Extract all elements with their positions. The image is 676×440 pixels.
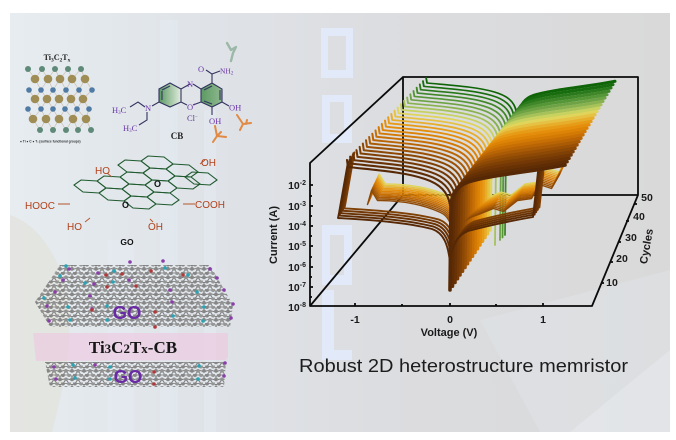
icon: orange figures — [213, 115, 251, 142]
cycles labels: 20 — [616, 253, 628, 265]
CB molecule: Cl — [187, 113, 195, 123]
y axis labels: 10 — [288, 221, 300, 233]
CB molecule: C — [132, 123, 138, 133]
GO molecule: O — [154, 179, 161, 189]
y axis labels — [288, 180, 306, 314]
CB molecule — [112, 43, 241, 141]
GO molecule: COOH — [195, 200, 225, 211]
y axis labels: -3 — [300, 201, 306, 208]
y axis labels: -5 — [300, 241, 306, 248]
pink Ti3C2Tx-CB layer — [33, 333, 228, 361]
cycles labels: 30 — [625, 232, 637, 244]
y axis labels: -4 — [300, 221, 306, 228]
y axis labels: -8 — [300, 302, 306, 309]
lower GO text: GO — [114, 366, 142, 387]
CB molecule: H — [123, 123, 129, 133]
GO molecule: HO — [95, 166, 110, 177]
chart frame front — [310, 77, 638, 306]
cycling curves — [338, 78, 615, 290]
CB molecule: 3 — [129, 129, 132, 134]
GO molecule: HO — [67, 222, 82, 233]
CB molecule: 3 — [118, 111, 121, 116]
y axis labels: -2 — [300, 180, 306, 187]
upper GO text: GO — [113, 302, 141, 323]
3D chart — [268, 77, 656, 339]
heterostructure model — [33, 259, 235, 387]
y axis labels: 10 — [288, 241, 300, 253]
GO label: GO — [120, 237, 134, 247]
CB molecule: N — [187, 79, 193, 89]
GO molecule: HOOC — [25, 201, 55, 212]
upper GO sheet — [35, 259, 235, 329]
x axis title: Voltage (V) — [421, 327, 478, 339]
icon: grey-green figure — [227, 43, 236, 61]
Ti3C2Tx heading: 2 — [60, 58, 63, 64]
CB molecule: NH — [220, 66, 231, 76]
x axis labels — [350, 314, 546, 326]
cycles labels — [606, 192, 653, 289]
y axis labels: -6 — [300, 262, 306, 269]
CB molecule: OH — [209, 116, 221, 126]
caption: Robust 2D heterostructure memristor — [299, 356, 628, 376]
y axis labels: 10 — [288, 282, 300, 294]
Ti3C2Tx heading: Ti — [44, 53, 51, 62]
Ti3C2Tx heading: C — [54, 53, 60, 62]
cycles labels: 40 — [633, 211, 645, 223]
Ti3C2Tx heading: 3 — [51, 58, 54, 64]
y axis title: Current (A) — [268, 206, 280, 264]
GO molecule — [25, 156, 225, 247]
y axis labels: 10 — [288, 180, 300, 192]
CB molecule: H — [112, 105, 118, 115]
cycles labels: 50 — [641, 192, 653, 204]
y axis labels: 10 — [288, 262, 300, 274]
y axis labels: 10 — [288, 201, 300, 213]
y axis labels: 10 — [288, 302, 300, 314]
x axis labels: -1 — [350, 314, 360, 326]
GO molecule: OH — [148, 222, 163, 233]
x axis labels: 1 — [540, 314, 546, 326]
CB molecule: O — [198, 64, 204, 74]
CB molecule: + — [193, 103, 196, 108]
cycles axis title: Cycles — [638, 228, 656, 265]
cycles labels: 10 — [606, 277, 618, 289]
CB molecule: O — [187, 102, 193, 112]
y axis labels: -7 — [300, 282, 306, 289]
chart frame back — [310, 77, 638, 306]
x axis labels: 0 — [447, 314, 453, 326]
CB molecule: OH — [229, 102, 241, 112]
Ti3C2Tx crystal structure — [20, 53, 95, 144]
Ti3C2Tx heading: T — [62, 53, 68, 62]
CB molecule: 2 — [231, 72, 234, 76]
crystal legend: ● Ti ● C ● Tₓ (surface functional groups) — [20, 140, 81, 144]
CB molecule: C — [121, 105, 127, 115]
Ti3C2Tx heading: x — [68, 58, 71, 64]
GO molecule: O — [122, 200, 129, 210]
lower GO sheet — [45, 361, 227, 387]
Ti3C2Tx-CB text: Ti3C2Tx-CB — [89, 338, 177, 357]
CB molecule: − — [195, 115, 198, 120]
GO molecule: OH — [201, 158, 216, 169]
CB molecule: N — [145, 103, 151, 113]
CB label: CB — [171, 131, 183, 141]
